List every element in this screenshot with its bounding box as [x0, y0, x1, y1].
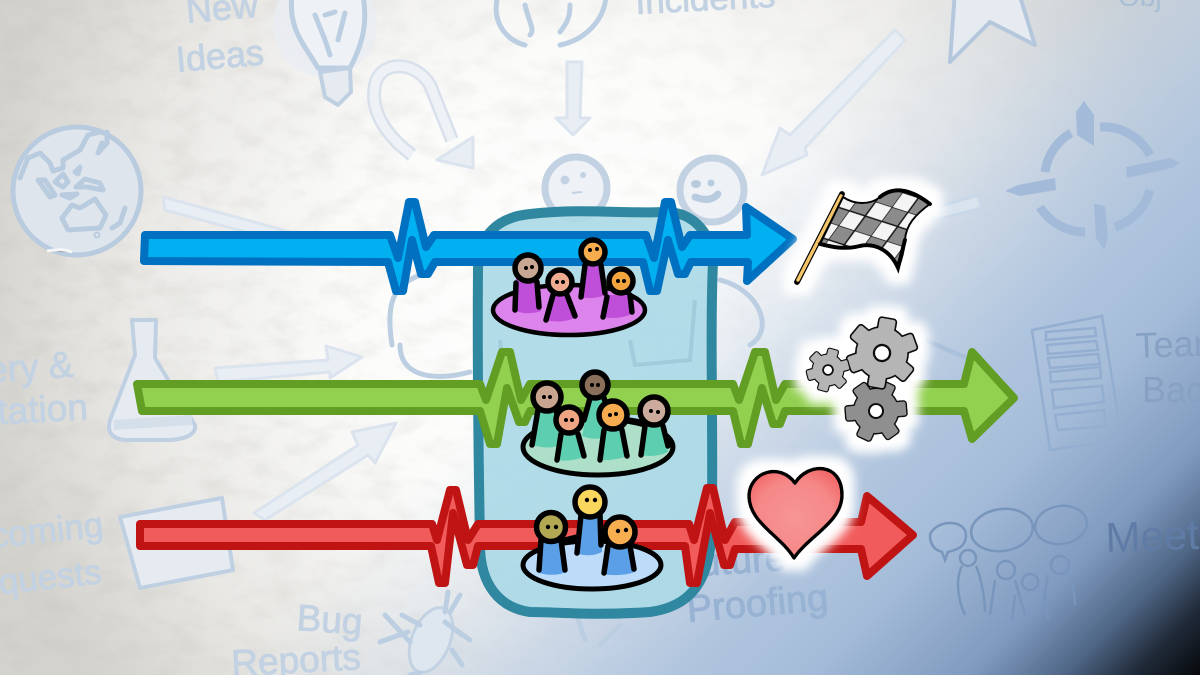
- text: Incoming Requests: [0, 505, 105, 602]
- platform: [523, 541, 661, 589]
- person: [628, 397, 668, 456]
- green arrow: [137, 352, 1014, 444]
- tank ghost sketch: [500, 300, 695, 393]
- icon: bug: [380, 592, 470, 675]
- team: purple group: [493, 240, 645, 335]
- icon: heart: [749, 468, 842, 558]
- icon: person two: [680, 158, 744, 222]
- icon: person bodies behind tank: [390, 275, 762, 376]
- icon: wrench: [575, 610, 620, 645]
- icon: target: [1005, 101, 1180, 250]
- arrow: diagonal to person: [762, 30, 905, 175]
- person: [599, 401, 627, 460]
- person: [536, 512, 577, 575]
- text: Discovery and Experimentation: [0, 344, 89, 432]
- person: [514, 255, 541, 313]
- icon: gears: [803, 313, 921, 451]
- arrow: flask to tank: [215, 346, 362, 382]
- person: [532, 383, 561, 448]
- red arrow: [140, 488, 913, 583]
- flag cloth: [820, 190, 930, 268]
- text: Future Proofing: uture: [698, 537, 787, 585]
- text: Future Proofing: Proofing: [685, 577, 830, 631]
- arrow: target tail: [930, 195, 982, 220]
- text: New Ideas: [174, 0, 265, 80]
- text: Future Proofing: [685, 537, 830, 631]
- team: green group: [523, 372, 673, 475]
- person: [546, 270, 575, 322]
- icon: checkered flag: [797, 190, 930, 282]
- large gear: [843, 313, 921, 393]
- arrow: requests to tank: [254, 423, 396, 520]
- team: blue group: [523, 487, 661, 589]
- icon: backlog document: [1032, 316, 1122, 450]
- person: [582, 372, 610, 439]
- icon: star: [950, 0, 1035, 62]
- team tank: [478, 211, 713, 614]
- person: [603, 269, 633, 318]
- text: Meetings: Meet: [1105, 511, 1200, 561]
- person: [581, 240, 605, 298]
- platform: [523, 419, 673, 475]
- flag shaded edges: [820, 190, 930, 268]
- platform: [493, 285, 645, 335]
- small gear: [803, 344, 853, 396]
- blue arrow: [144, 202, 793, 291]
- icon: fire circle: [496, 0, 606, 45]
- flag pole: [797, 194, 842, 282]
- arrow: backlog tail: [925, 340, 990, 368]
- person: [603, 517, 635, 575]
- text: Team Backlog: [1135, 323, 1200, 410]
- text: Bug Reports: Bug: [295, 597, 364, 643]
- icon: light bulb: [273, 0, 377, 105]
- icon: flask: [109, 320, 195, 440]
- person: [556, 407, 584, 461]
- lower gear: [837, 371, 915, 451]
- arrow: down: [556, 62, 590, 135]
- icon: globe: [13, 127, 141, 255]
- person: [575, 487, 605, 555]
- text: Bug Reports: [230, 597, 364, 675]
- text: New Ideas: Ideas: [174, 31, 265, 80]
- icon: person one: [545, 157, 607, 219]
- icon: meeting people: [930, 503, 1089, 620]
- icon: request form: [120, 498, 233, 588]
- arrow: tail from globe: [163, 197, 290, 244]
- arrow: curved: [374, 66, 473, 168]
